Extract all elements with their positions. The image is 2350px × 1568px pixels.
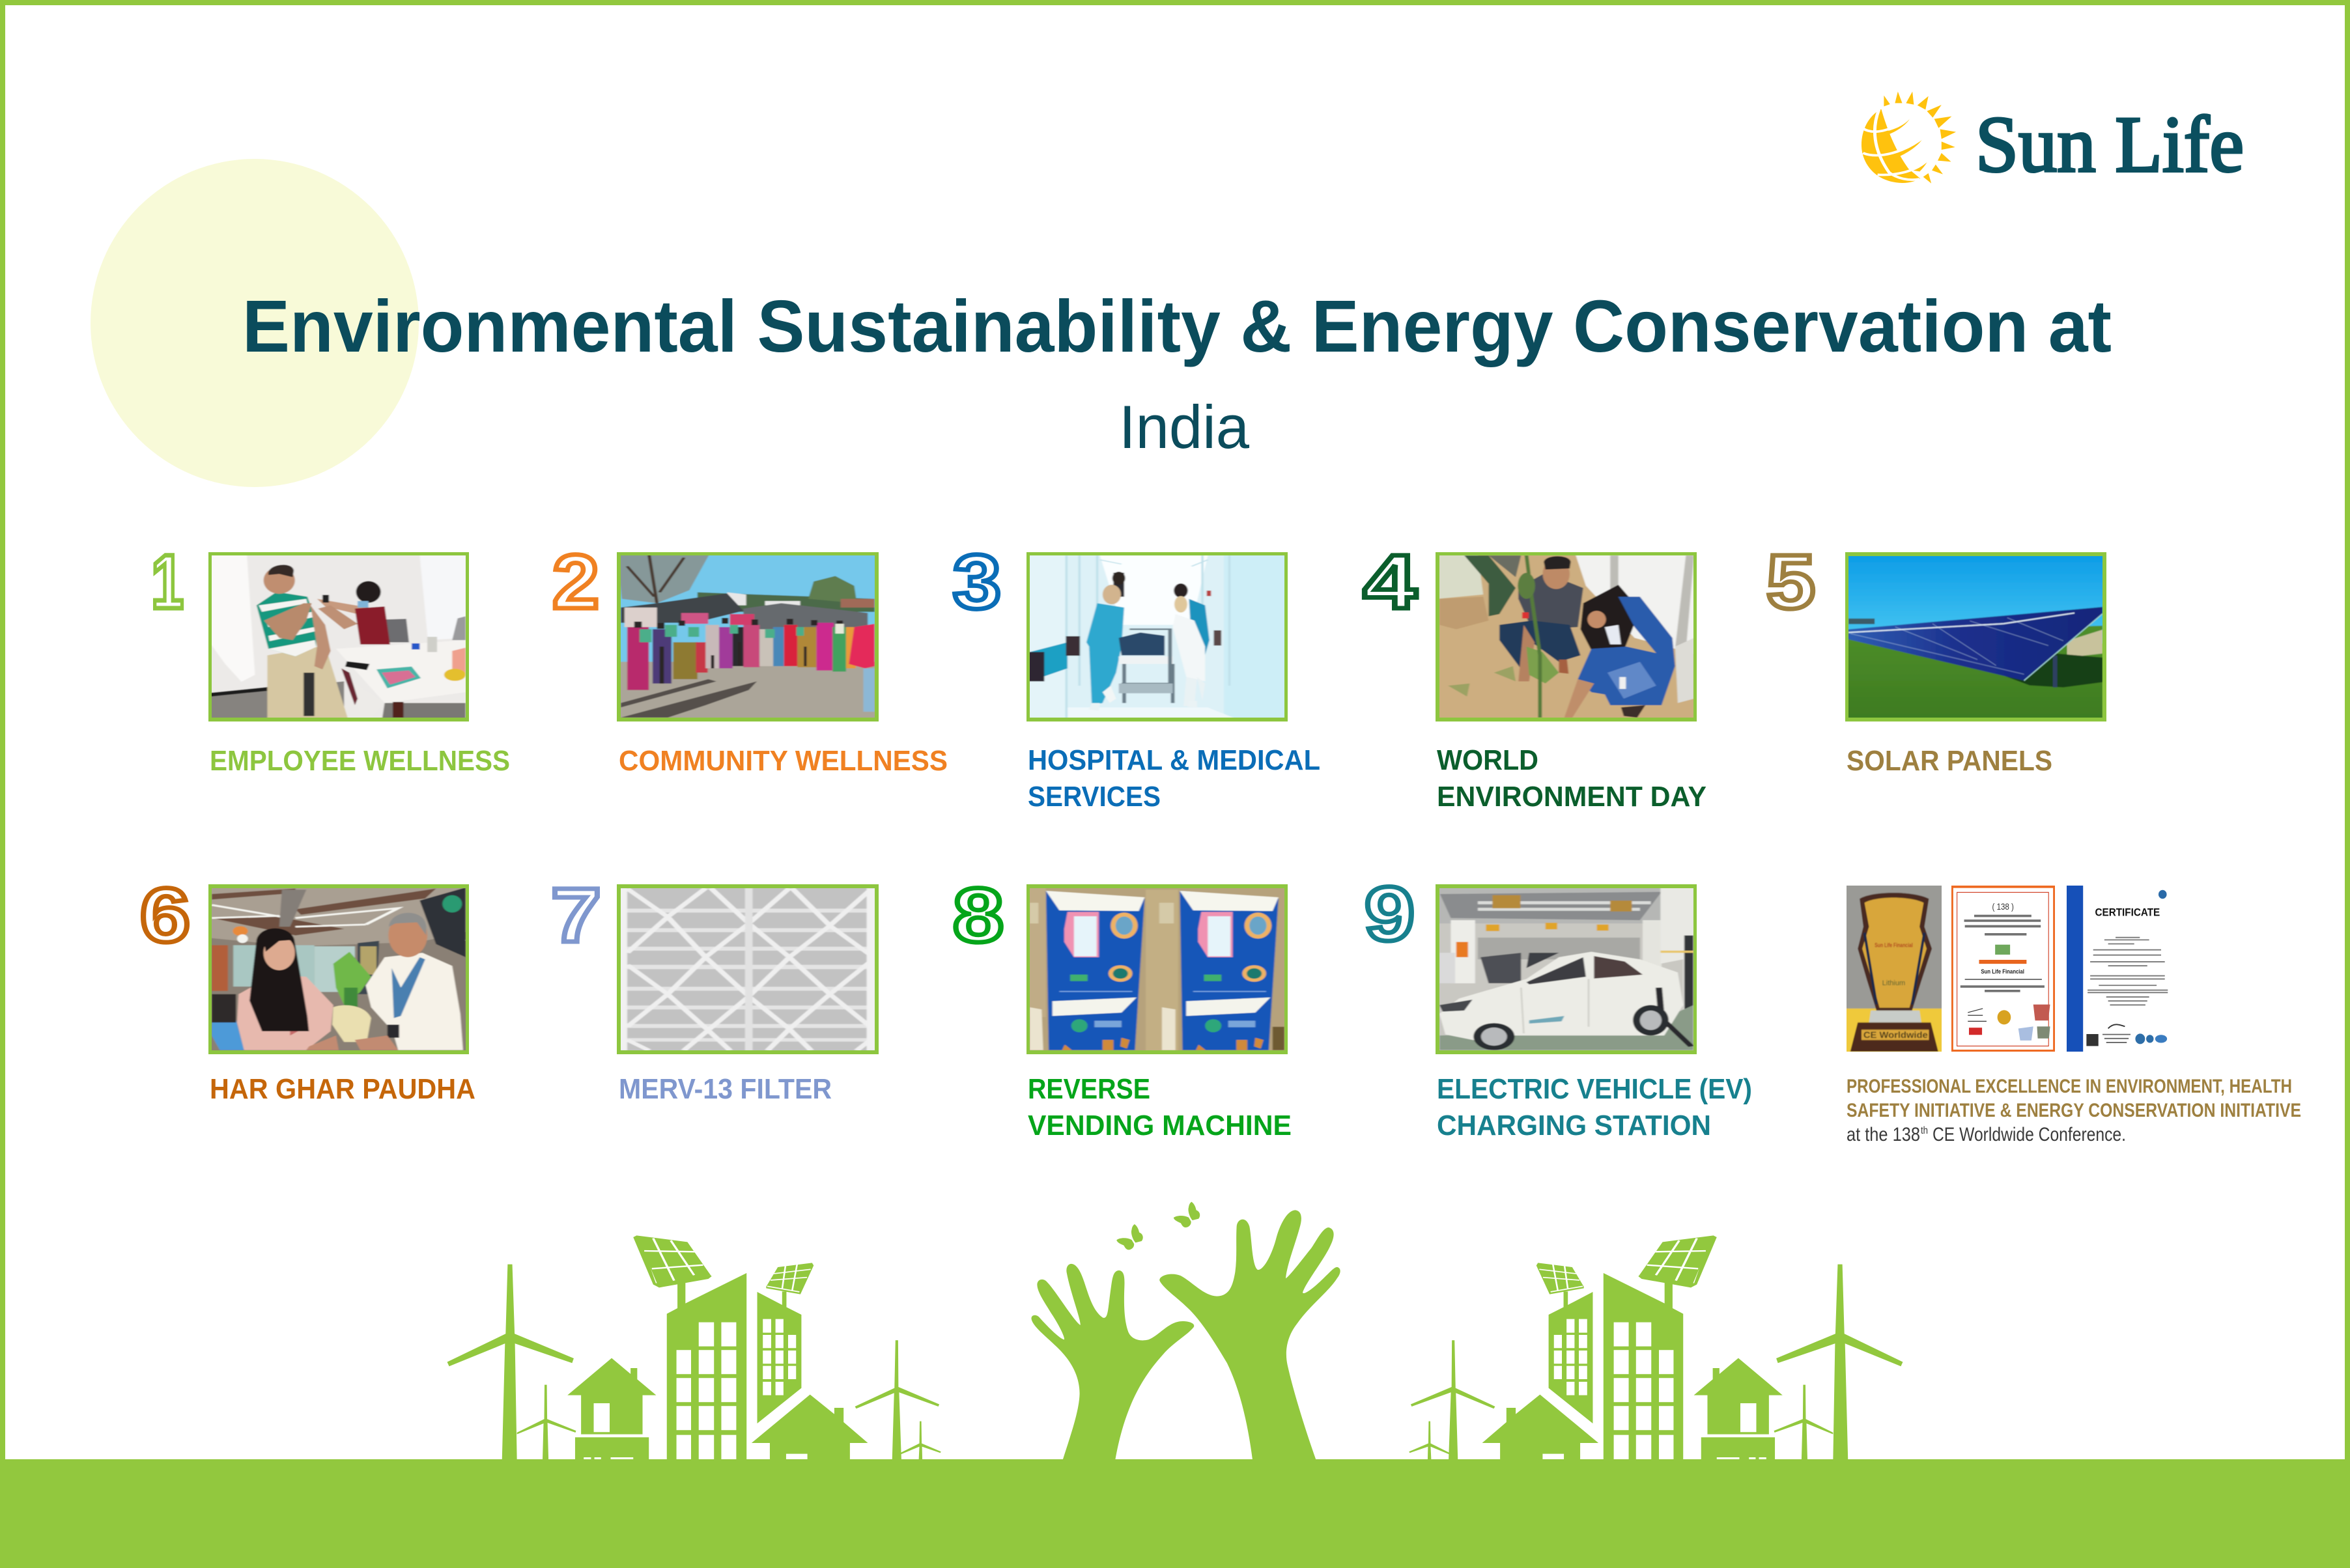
number 4: 4 <box>1363 539 1417 625</box>
logo wordmark: Sun Life <box>1975 100 2244 189</box>
label: COMMUNITY WELLNESS <box>619 745 948 777</box>
label: MERV-13 FILTER <box>619 1073 832 1105</box>
panel: world environment day <box>1363 539 1706 813</box>
panel: employee wellness <box>151 539 510 777</box>
label <box>1028 744 1320 813</box>
number 2: 2 <box>552 539 599 625</box>
photo: vending machines <box>1025 884 1289 1054</box>
number 8: 8 <box>953 873 1004 959</box>
number 6: 6 <box>140 873 190 959</box>
number 3: 3 <box>953 539 1001 625</box>
photo: trophy: Sun Life Financial <box>1875 942 1913 948</box>
label: VENDING MACHINE <box>1028 1110 1292 1141</box>
icon: butterfly right <box>1174 1202 1200 1227</box>
number 9: 9 <box>1365 871 1415 957</box>
skyline: left <box>447 1235 941 1461</box>
label: SOLAR PANELS <box>1847 745 2052 777</box>
award caption: CE Worldwide Conference. <box>1932 1124 2126 1145</box>
icon: butterfly left <box>1116 1224 1143 1250</box>
subtitle: India <box>1119 393 1250 461</box>
label <box>1437 1073 1752 1141</box>
panel: hospital and medical services <box>953 539 1320 813</box>
photo: trophy: CE Worldwide <box>1863 1030 1928 1040</box>
illustration: raised hands and butterflies <box>1031 1202 1340 1461</box>
label: CHARGING STATION <box>1437 1110 1711 1141</box>
photo: ISO certificate: CERTIFICATE <box>2095 907 2160 919</box>
photo: community group <box>614 552 884 721</box>
panel: solar panels <box>1766 539 2106 777</box>
number 5: 5 <box>1766 539 1815 625</box>
panel: awards <box>1843 882 2301 1145</box>
number 7: 7 <box>551 873 601 959</box>
photo: award certificate: ( 138 ) <box>1992 901 2014 912</box>
award caption: th <box>1921 1125 1928 1136</box>
photo: tree planting <box>1435 552 1699 721</box>
photo: trophy <box>1847 886 1942 1052</box>
ground band <box>0 1459 2350 1568</box>
panel: har ghar paudha <box>140 873 475 1105</box>
label: EMPLOYEE WELLNESS <box>210 745 510 777</box>
icon: sun globe <box>1862 92 1956 184</box>
photo: air filter <box>616 884 881 1054</box>
photo: solar panels <box>1845 552 2106 721</box>
number 1: 1 <box>151 539 184 625</box>
label <box>1437 744 1706 813</box>
panel: community wellness <box>552 539 948 777</box>
photo: trophy: Lithium <box>1882 979 1905 987</box>
panel: electric vehicle charging station <box>1365 871 1752 1141</box>
icon: left hand <box>1031 1264 1194 1461</box>
skyline: right (mirrored) <box>1409 1235 1903 1461</box>
icon: right hand <box>1159 1210 1340 1461</box>
decorative circle <box>91 159 419 487</box>
label: HAR GHAR PAUDHA <box>210 1073 475 1105</box>
photo: ISO certificate <box>2067 886 2168 1052</box>
label: REVERSE <box>1028 1073 1150 1105</box>
label <box>1028 1073 1292 1141</box>
award caption: at the 138 <box>1847 1124 1920 1145</box>
label: ENVIRONMENT DAY <box>1437 781 1706 813</box>
title: Environmental Sustainability & Energy Conservation at <box>242 285 2112 367</box>
photo: plant handover <box>206 884 471 1054</box>
panel: reverse vending machine <box>953 873 1292 1141</box>
panel: merv-13 filter <box>551 873 881 1105</box>
photo: award certificate <box>1951 886 2055 1052</box>
logo: Sun Life <box>1862 92 2244 189</box>
photo: award certificate: Sun Life Financial <box>1981 968 2024 975</box>
award caption <box>1847 1076 2301 1145</box>
label: ELECTRIC VEHICLE (EV) <box>1437 1073 1752 1105</box>
photo: EV charging <box>1435 884 1699 1054</box>
photo: employee vaccination <box>206 552 471 721</box>
label: WORLD <box>1437 744 1538 776</box>
label: HOSPITAL & MEDICAL <box>1028 744 1320 776</box>
label: SERVICES <box>1028 781 1161 813</box>
photo: hospital corridor <box>1025 552 1289 721</box>
